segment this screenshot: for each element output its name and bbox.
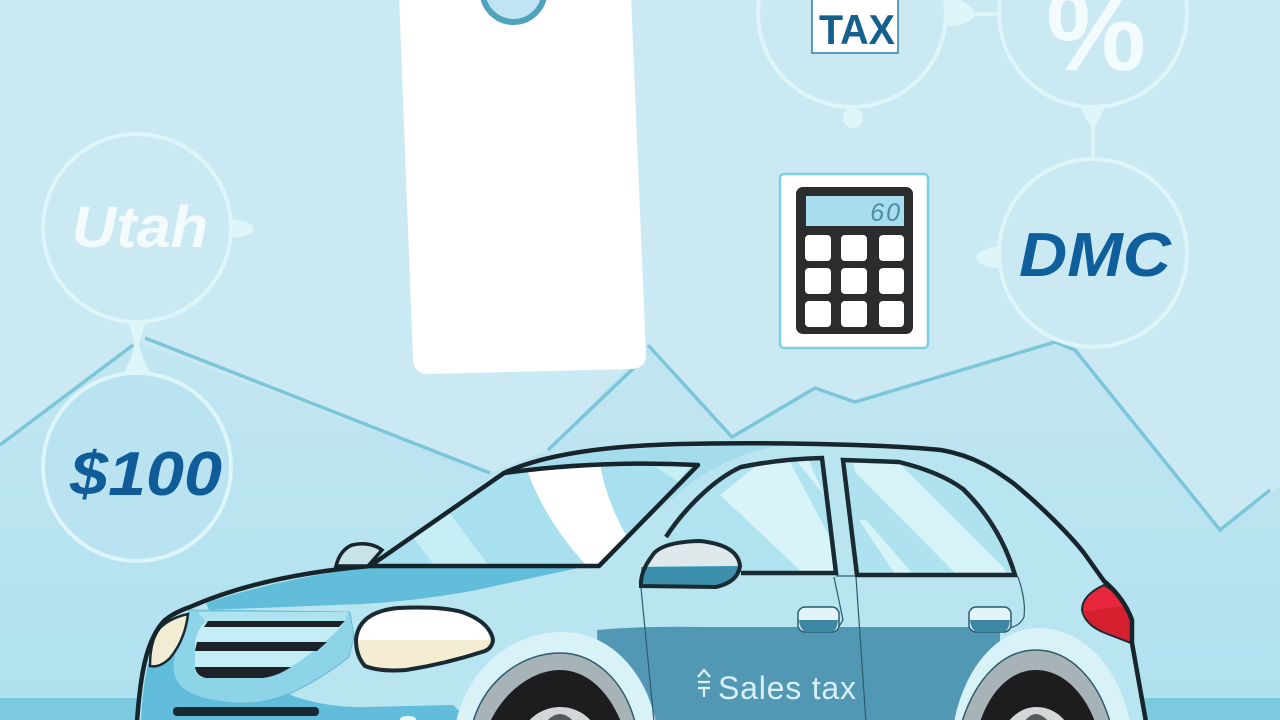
calculator display: 60	[870, 199, 902, 227]
calculator icon	[780, 174, 928, 348]
front bumper	[141, 650, 470, 720]
tag hole	[482, 0, 544, 22]
circle: DMC	[999, 159, 1187, 347]
connector: tax to percent	[947, 0, 998, 26]
door handle: rear	[969, 607, 1011, 632]
car outline	[137, 443, 1146, 720]
headlight	[356, 608, 493, 670]
line chart background	[0, 338, 1280, 720]
door seams	[641, 576, 1024, 720]
sales tax door label: Sales tax	[718, 670, 856, 706]
tax dot connector	[843, 108, 863, 128]
car body	[137, 443, 1146, 720]
lower grille bar	[173, 707, 319, 716]
circle: tax	[758, 0, 946, 107]
windshield	[370, 464, 698, 566]
side mirror	[640, 541, 740, 587]
calculator keys	[805, 235, 904, 327]
front wheel	[456, 632, 656, 720]
roof shade	[504, 446, 780, 510]
grille	[195, 621, 345, 678]
Utah label: Utah	[72, 195, 208, 260]
grille surround	[173, 610, 354, 703]
arrows icon	[698, 670, 710, 697]
hood shade	[206, 567, 584, 610]
circle: Utah	[43, 134, 231, 322]
door handle: front	[798, 607, 839, 632]
Utah connector bump	[232, 219, 254, 238]
DMC label: DMC	[1019, 221, 1172, 290]
connector: Utah to $100	[124, 321, 150, 372]
lower door panel	[597, 627, 1000, 720]
tail light	[1082, 585, 1131, 643]
circle: percent	[999, 0, 1187, 107]
price tag	[399, 0, 646, 374]
car illustration	[137, 443, 1146, 720]
connector: percent to DMC	[1081, 106, 1105, 158]
side lamp	[150, 614, 188, 666]
wing mirror on hood	[336, 544, 382, 566]
rear door window	[843, 460, 1015, 575]
circle: $100	[43, 373, 231, 561]
front door window	[660, 458, 836, 573]
rear wheel	[954, 628, 1130, 720]
DMC connector bump	[976, 246, 1000, 268]
floor band	[0, 698, 1280, 720]
bumper light spot	[400, 716, 416, 720]
tax label: TAX	[819, 6, 895, 53]
grille top panel	[198, 612, 348, 622]
$100 label: $100	[69, 440, 222, 509]
